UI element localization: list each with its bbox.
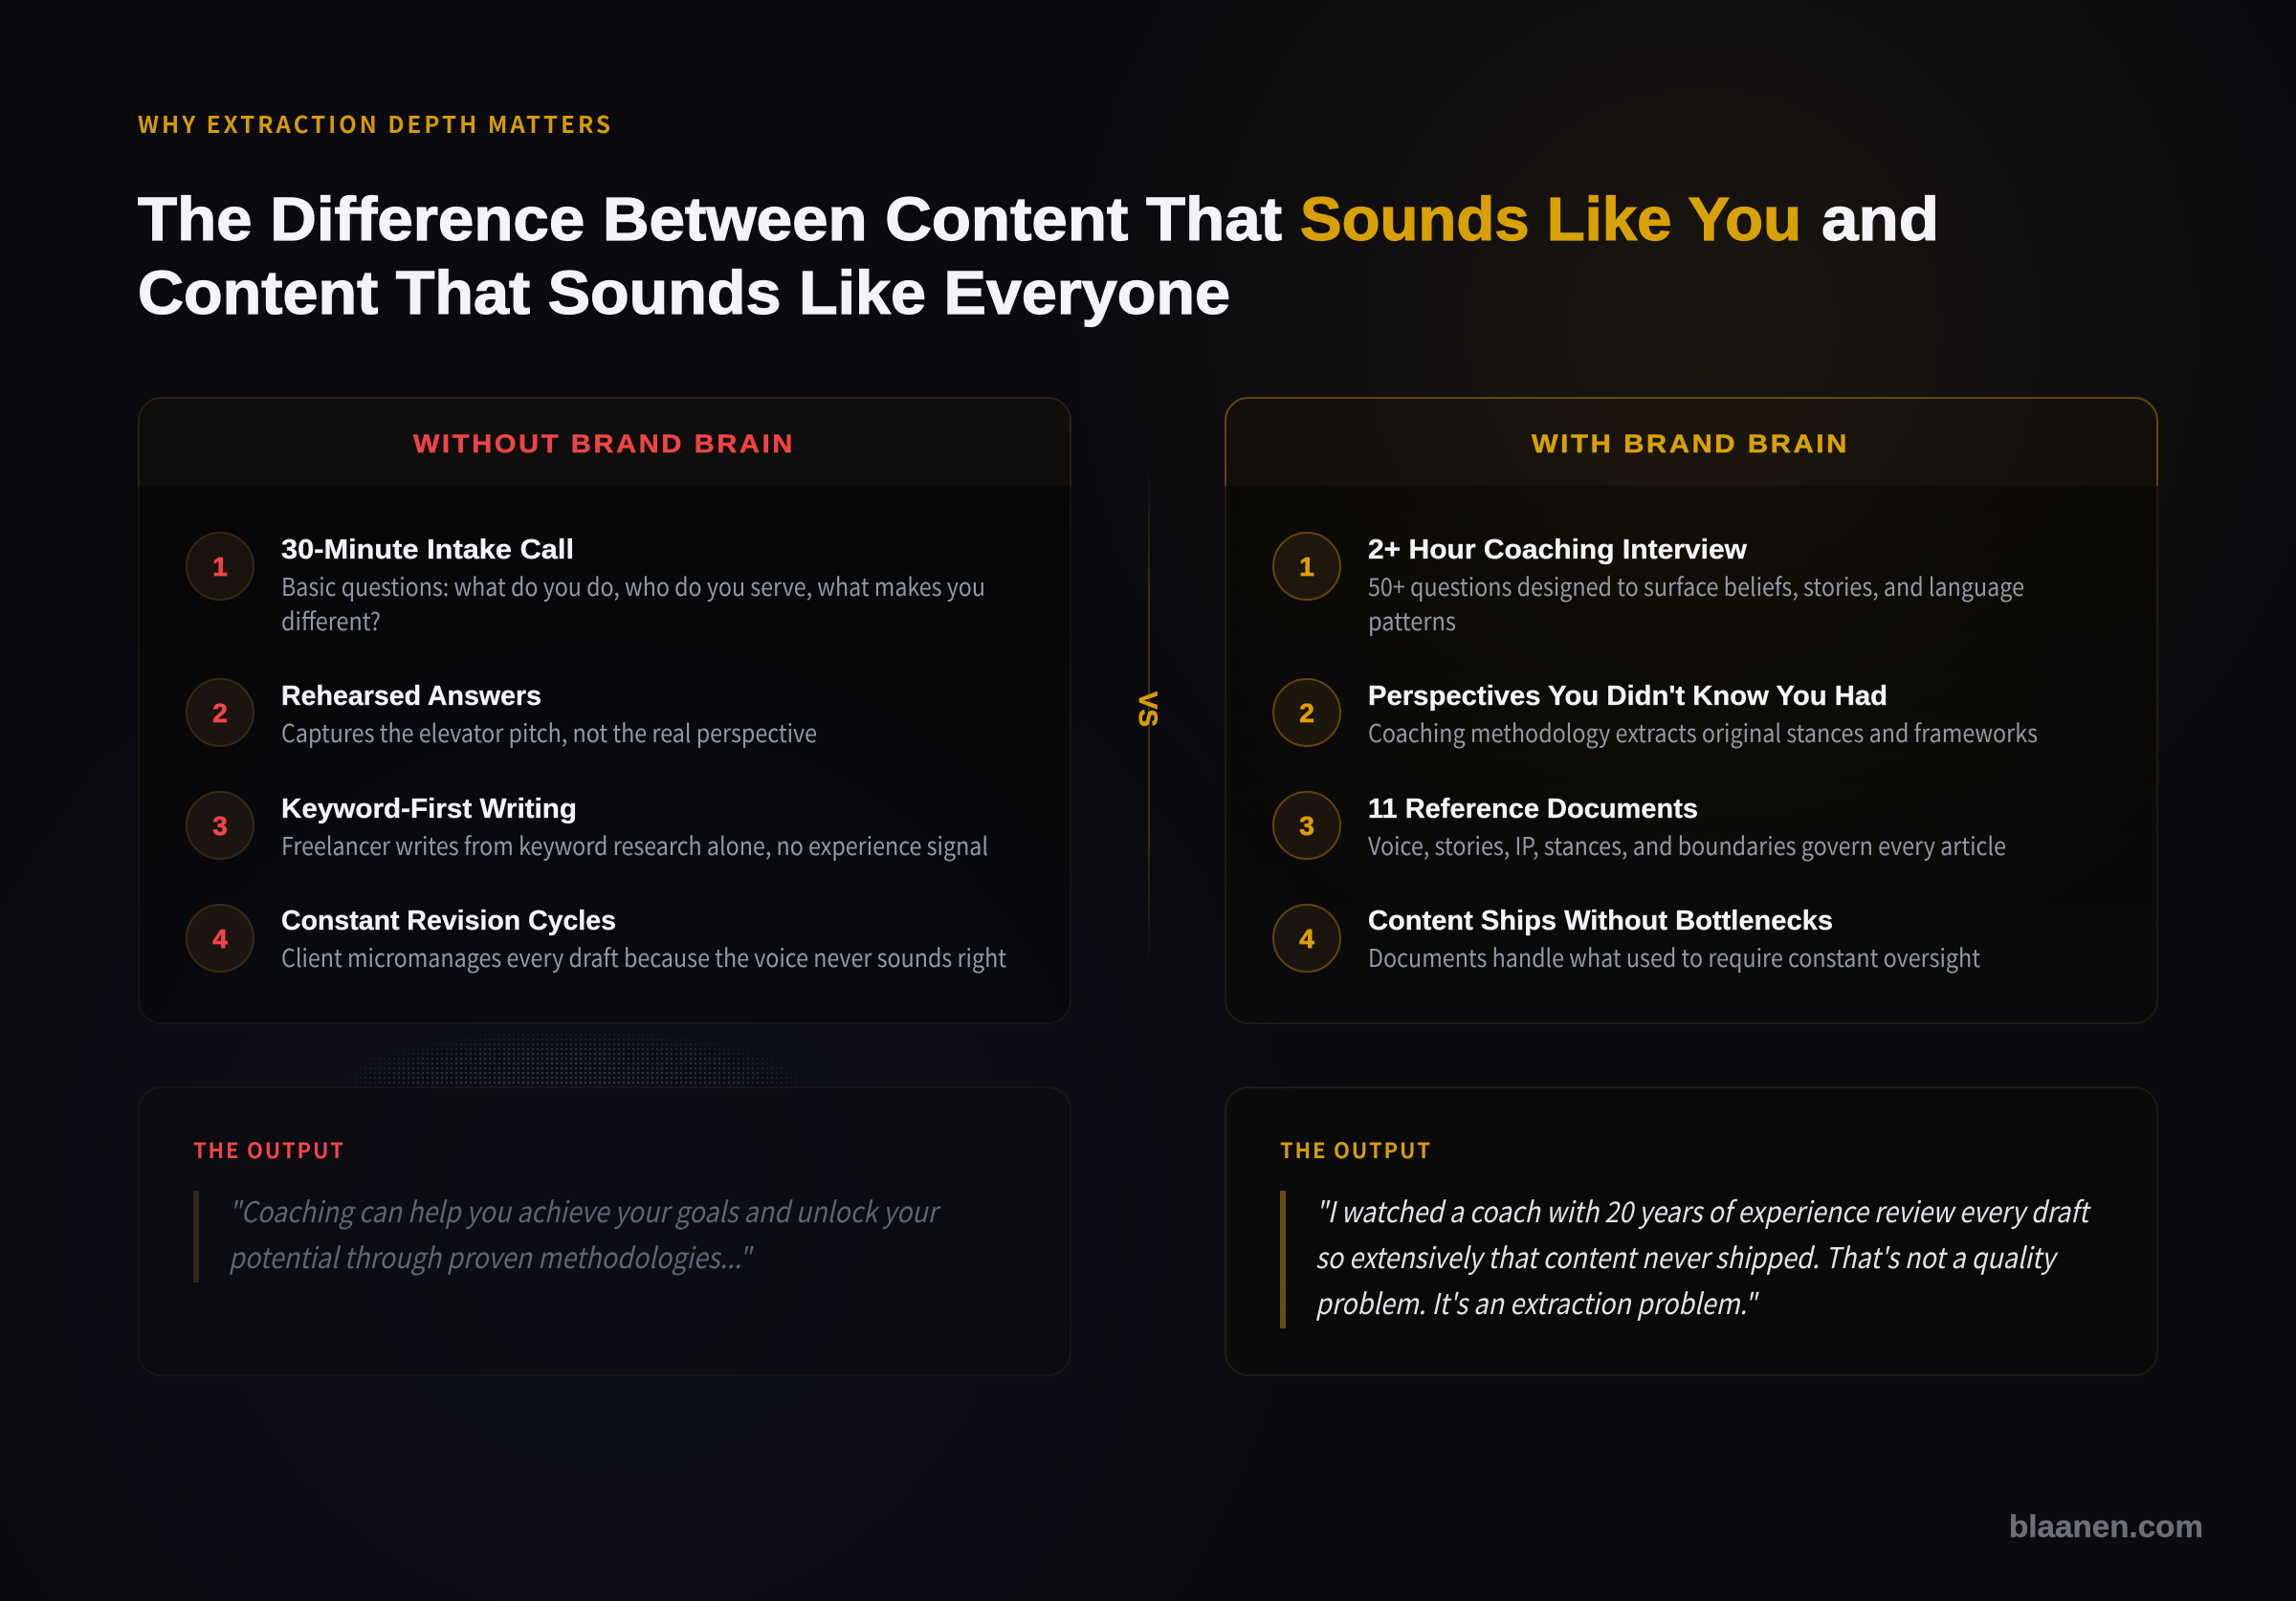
step 3: 3 (1299, 811, 1314, 841)
step 4: Content Ships Without Bottlenecks (1368, 906, 1833, 936)
step 1 (1273, 533, 2024, 638)
header: without brand brain: WITHOUT BRAND BRAIN (413, 429, 795, 458)
step 3: Freelancer writes from keyword research alone, no experience signal (281, 827, 988, 863)
step 4: 4 (1299, 924, 1314, 954)
step 3: 3 (212, 811, 228, 841)
step 2: 2 (1299, 698, 1314, 728)
header: with brand brain: WITH BRAND BRAIN (1532, 429, 1849, 458)
step 4 (1273, 905, 1980, 975)
step 2: 2 (212, 698, 228, 728)
header: without brand brain (139, 398, 1071, 486)
step 4: Documents handle what used to require constant oversight (1368, 939, 1980, 975)
step 3: Keyword-First Writing (281, 794, 577, 824)
quote (229, 1189, 941, 1277)
label: the output: THE OUTPUT (1280, 1134, 1430, 1165)
quote: potential through proven methodologies..." (229, 1235, 754, 1277)
panel: without brand brain (139, 398, 1071, 1023)
panel: output without (139, 1087, 1071, 1375)
step 2: Captures the elevator pitch, not the real perspective (281, 714, 817, 750)
title: The Difference Between Content That (138, 185, 1282, 253)
step 2: Perspectives You Didn't Know You Had (1368, 681, 1888, 712)
quote: problem. It's an extraction problem." (1315, 1281, 1759, 1323)
step 1: 30-Minute Intake Call (281, 535, 574, 565)
footer: site name: blaanen.com (2009, 1509, 2203, 1544)
divider: vs: VS (1134, 691, 1162, 727)
step 2: Rehearsed Answers (281, 681, 541, 712)
step 4 (187, 905, 1006, 975)
step 1: Basic questions: what do you do, who do you serve, what makes you (281, 568, 985, 603)
title: Content That Sounds Like Everyone (138, 258, 1230, 327)
title: and (1821, 185, 1939, 253)
step 2 (187, 679, 817, 750)
quote (1315, 1189, 2091, 1323)
header: with brand brain (1225, 398, 2157, 486)
title (138, 185, 1939, 327)
step 3 (187, 792, 988, 863)
step 2 (1273, 679, 2038, 750)
step 4: 4 (212, 924, 228, 954)
title: Sounds Like You (1300, 185, 1801, 253)
step 3: Voice, stories, IP, stances, and boundaries govern every article (1368, 827, 2006, 863)
accent bar (1280, 1191, 1286, 1328)
panel: output with (1225, 1087, 2157, 1375)
step 4: Constant Revision Cycles (281, 906, 616, 936)
step 1 (187, 533, 985, 638)
step 1: 1 (1299, 552, 1314, 581)
quote: so extensively that content never shipped. That's not a quality (1315, 1235, 2059, 1277)
quote: "Coaching can help you achieve your goals and unlock your (229, 1189, 941, 1231)
step 1: 2+ Hour Coaching Interview (1368, 535, 1747, 565)
step 3: 11 Reference Documents (1368, 794, 1698, 824)
step 1: different? (281, 603, 381, 638)
eyebrow: WHY EXTRACTION DEPTH MATTERS (138, 106, 610, 140)
accent bar (193, 1191, 199, 1283)
quote: "I watched a coach with 20 years of experience review every draft (1315, 1189, 2091, 1231)
step 1: patterns (1368, 603, 1456, 638)
step 1: 50+ questions designed to surface beliefs, stories, and language (1368, 568, 2024, 603)
step 1: 1 (212, 552, 228, 581)
step 3 (1273, 792, 2006, 863)
panel: with brand brain (1225, 398, 2157, 1023)
label: the output: THE OUTPUT (193, 1134, 343, 1165)
step 4: Client micromanages every draft because the voice never sounds right (281, 939, 1006, 975)
step 2: Coaching methodology extracts original stances and frameworks (1368, 714, 2038, 750)
